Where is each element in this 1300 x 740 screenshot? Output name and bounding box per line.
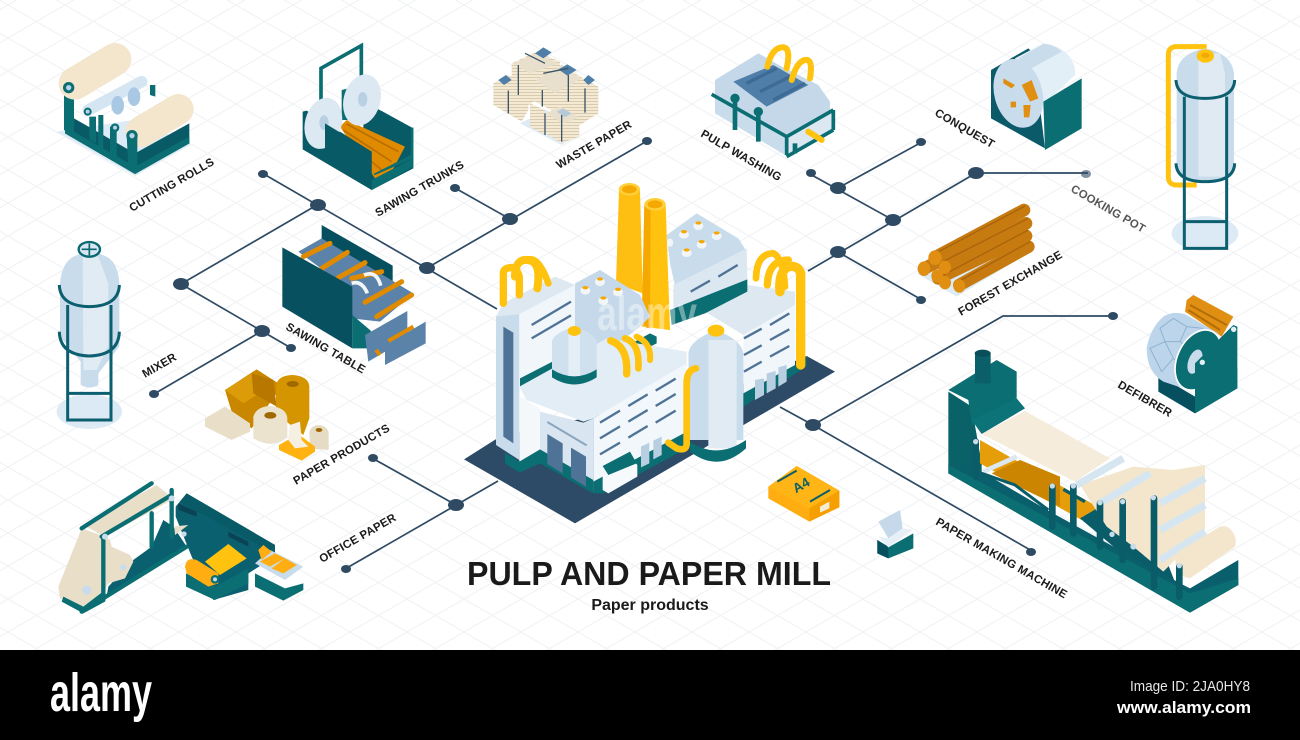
label: mixer: MIXER xyxy=(140,351,179,381)
illustration: conquest drum xyxy=(986,43,1082,150)
watermark footer bar xyxy=(0,650,1300,740)
flowchart connector network xyxy=(149,137,1118,573)
illustration: office paper machine xyxy=(58,483,303,613)
right wing xyxy=(705,285,795,335)
watermark footer bar: alamy xyxy=(50,663,152,723)
icon: small tissue dispenser xyxy=(877,510,913,558)
label: sawing trunks: SAWING TRUNKS xyxy=(374,159,467,220)
label: defibrer: DEFIBRER xyxy=(1116,379,1174,420)
rear building xyxy=(667,213,747,293)
small tank xyxy=(552,327,597,377)
icon: A4 paper ream xyxy=(768,466,839,522)
front lower block xyxy=(519,338,687,422)
label: paper products: PAPER PRODUCTS xyxy=(292,422,392,488)
title: PULP AND PAPER MILL xyxy=(467,555,831,592)
subtitle: Paper products xyxy=(591,597,709,614)
chimneys xyxy=(616,190,643,293)
illustration: mixer xyxy=(57,242,122,429)
label: office paper: OFFICE PAPER xyxy=(318,512,399,566)
illustration: paper making machine xyxy=(948,350,1238,613)
watermark footer bar: www.alamy.com xyxy=(1116,698,1251,717)
illustration: cutting rolls xyxy=(57,59,192,176)
label: cooking pot: COOKING POT xyxy=(1068,183,1147,236)
label: sawing table: SAWING TABLE xyxy=(284,321,367,377)
label: conquest: CONQUEST xyxy=(932,107,996,151)
label: cutting rolls: CUTTING ROLLS xyxy=(128,156,217,215)
icon: A4 paper ream: A4 xyxy=(790,474,813,496)
label: pulp washing: PULP WASHING xyxy=(698,128,783,184)
illustration: forest exchange logs xyxy=(917,206,1033,297)
illustration: pulp washing machine xyxy=(712,47,833,157)
illustration: sawing trunks xyxy=(299,46,413,190)
left tower xyxy=(496,303,519,460)
watermark footer bar: Image ID: 2JA0HY8 xyxy=(1130,678,1250,695)
illustration: paper products xyxy=(205,369,329,461)
label: paper making machine: PAPER MAKING MACHINE xyxy=(934,516,1069,601)
small pipes xyxy=(611,341,627,374)
label: waste paper: WASTE PAPER xyxy=(554,118,635,172)
label: forest exchange: FOREST EXCHANGE xyxy=(956,249,1065,319)
illustration: cooking pot xyxy=(1168,47,1238,251)
big tank xyxy=(688,330,743,440)
watermark: alamy xyxy=(597,288,697,341)
illustration: waste paper stacks xyxy=(493,47,598,145)
illustration: sawing table xyxy=(282,225,426,365)
central pulp and paper mill building xyxy=(464,183,835,523)
illustration: defibrer xyxy=(1147,295,1237,413)
middle block xyxy=(575,270,650,357)
